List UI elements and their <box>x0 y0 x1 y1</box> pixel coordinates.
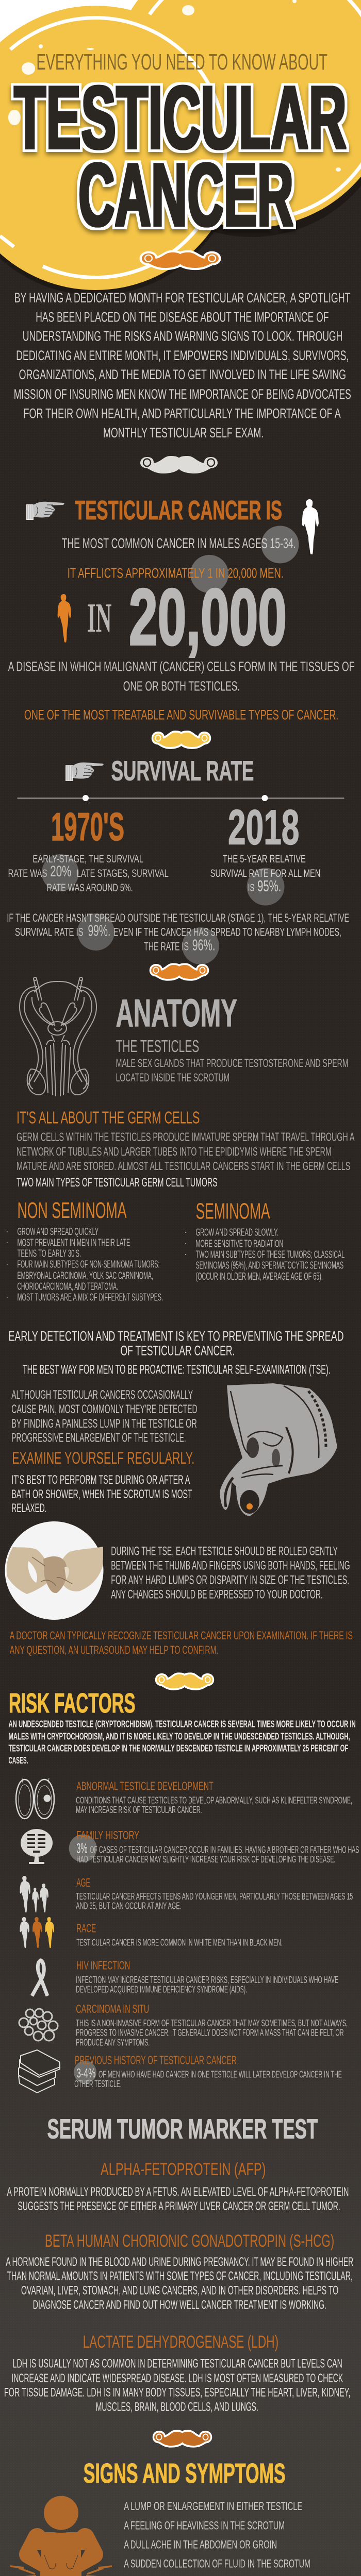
panel: seminoma: MORE SENSITIVE TO RADIATION <box>196 1238 283 1249</box>
icon: cells <box>19 2009 58 2041</box>
risk: race <box>20 1917 283 1948</box>
1970s survival text: LATE STAGES, SURVIVAL <box>77 868 169 879</box>
1970s survival text: RATE WAS <box>8 868 47 879</box>
detection paragraph: CAUSE PAIN, MOST COMMONLY THEY'RE DETECTED <box>11 1402 198 1416</box>
marker: beta HCG <box>6 2231 353 2312</box>
marker: AFP <box>7 2160 349 2213</box>
the testicles text: THE TESTICLES <box>116 1037 199 1056</box>
risk: carcinoma in situ: PRODUCE ANY SYMPTOMS. <box>76 2037 150 2047</box>
best time text: BATH OR SHOWER, WHEN THE SCROTUM IS MOST <box>11 1487 192 1501</box>
panel: non seminoma: MOST PREVALENT IN MEN IN THEIR LATE <box>18 1236 130 1249</box>
symptoms list: A DULL ACHE IN THE ABDOMEN OR GROIN <box>124 2538 277 2551</box>
doctor callout: ANY QUESTION, AN ULTRASOUND MAY HELP TO CONFIRM. <box>10 1643 218 1656</box>
risk: abnormal development <box>16 1778 352 1819</box>
risk: previous history: OTHER TESTICLE. <box>74 2079 122 2089</box>
best time text <box>11 1473 192 1515</box>
marker: LDH <box>4 2332 350 2414</box>
TSE technique text <box>111 1544 350 1601</box>
panel: non seminoma: NON SEMINOMA <box>18 1198 127 1223</box>
stage survival paragraph: SURVIVAL RATE IS <box>15 926 84 939</box>
icon: white man silhouette <box>302 499 319 554</box>
detection paragraph: ALTHOUGH TESTICULAR CANCERS OCCASIONALLY <box>11 1388 193 1402</box>
icon: family tree <box>21 1829 53 1864</box>
year: 2018: 2018 <box>228 800 299 855</box>
intro paragraph: MONTHLY TESTICULAR SELF EXAM. <box>103 425 264 440</box>
stat: in 20,000 <box>87 572 287 662</box>
icon: yellow moustache <box>153 733 209 747</box>
risk: family history: 3% <box>76 1840 88 1856</box>
2018 survival text: THE 5-YEAR RELATIVE <box>223 853 306 865</box>
examine yourself heading: EXAMINE YOURSELF REGULARLY. <box>12 1449 194 1467</box>
risk: HIV infection <box>32 1959 338 1996</box>
risk: previous history: 3-4% <box>76 2066 95 2080</box>
icon: pointing hand <box>26 502 64 520</box>
highlight circle: one in <box>190 555 228 593</box>
risk: abnormal development: ABNORMAL TESTICLE DEVELOPMENT <box>76 1780 214 1793</box>
2018 survival text: 95%. <box>257 877 281 895</box>
icon: stack of books <box>19 2050 60 2093</box>
icon: white moustache <box>140 456 218 473</box>
panel: seminoma <box>185 1199 344 1282</box>
panel: non seminoma: FOUR MAIN SUBTYPES OF NON-SEMINOMA TUMORS: <box>18 1259 159 1270</box>
1970s survival text: EARLY-STAGE, THE SURVIVAL <box>32 853 143 865</box>
heading: germ cells: IT'S ALL ABOUT THE GERM CELLS <box>17 1108 200 1127</box>
detection paragraph <box>11 1388 198 1445</box>
heading: risk factors: RISK FACTORS <box>9 1688 135 1719</box>
risk: previous history <box>19 2050 342 2093</box>
icon: orange man <box>58 594 71 642</box>
icon: three people <box>20 1876 48 1912</box>
early detection heading: OF TESTICULAR CANCER. <box>121 1343 235 1359</box>
panel: non seminoma: TEENS TO EARLY 30'S. <box>18 1248 81 1260</box>
icon: orange moustache anatomy <box>151 965 207 979</box>
risk: HIV infection: HIV INFECTION <box>76 1959 130 1972</box>
1970s survival text <box>8 853 169 894</box>
header discs <box>0 0 361 295</box>
risk: carcinoma in situ <box>19 2002 348 2047</box>
definition text <box>8 659 355 693</box>
panel: seminoma: GROW AND SPREAD SLOWLY. <box>196 1226 278 1239</box>
icon: pointing hand survival <box>65 762 104 781</box>
symptoms list <box>124 2500 326 2576</box>
risk: previous history: PREVIOUS HISTORY OF TESTICULAR CANCER <box>75 2053 237 2066</box>
year: 1970s: 1970'S <box>51 805 124 849</box>
best time text: RELAXED. <box>11 1501 47 1515</box>
panel: seminoma: SEMINOMA <box>196 1199 270 1224</box>
stage survival paragraph: 99%. <box>88 922 110 940</box>
icon: anatomical cross-section <box>220 1383 337 1516</box>
undescended testicle paragraph <box>8 1719 356 1766</box>
risk: abnormal development: MAY INCREASE RISK OF TESTICULAR CANCER. <box>76 1805 202 1815</box>
icon: orange moustache <box>142 252 219 268</box>
germ cells paragraph <box>17 1130 355 1173</box>
icon: ribbon <box>32 1960 47 1996</box>
icon: person in pain <box>9 2496 113 2576</box>
2018 survival text: IS <box>248 882 254 894</box>
best time text: IT'S BEST TO PERFORM TSE DURING OR AFTER A <box>11 1473 190 1487</box>
stage survival paragraph <box>7 911 349 964</box>
heading: anatomy: ANATOMY <box>116 991 237 1035</box>
doctor callout <box>10 1629 353 1656</box>
icon: anatomy line drawing <box>20 977 96 1096</box>
heading: survival rate: SURVIVAL RATE <box>111 756 254 787</box>
icon: testicles <box>16 1778 54 1819</box>
risk: family history <box>21 1828 359 1865</box>
risk: age: AND 35, BUT CAN OCCUR AT ANY AGE. <box>76 1901 182 1911</box>
panel: non seminoma: GROW AND SPREAD QUICKLY <box>18 1226 99 1238</box>
risk: age: AGE <box>76 1876 90 1889</box>
detection paragraph: PROGRESSIVE ENLARGEMENT OF THE TESTICLE. <box>11 1431 186 1445</box>
marker: AFP: ALPHA-FETOPROTEIN (AFP) <box>101 2160 266 2179</box>
timeline <box>18 795 344 801</box>
title: testicular cancer <box>14 67 347 245</box>
1970s survival text: RATE WAS AROUND 5%. <box>47 882 133 894</box>
highlight circle: ages <box>261 526 299 564</box>
detection paragraph: BY FINDING A PAINLESS LUMP IN THE TESTICLE OR <box>11 1417 197 1431</box>
panel: non seminoma <box>7 1198 163 1303</box>
1970s survival text: 20% <box>50 863 71 880</box>
definition text: ONE OR BOTH TESTICLES. <box>123 678 240 693</box>
illustration: hands self-exam <box>5 1521 103 1620</box>
stage survival paragraph: 96%. <box>192 936 215 954</box>
two main types subheading: TWO MAIN TYPES OF TESTICULAR GERM CELL TUMORS <box>17 1176 218 1190</box>
risk: age <box>20 1876 353 1912</box>
panel: non seminoma: CHORIOCARCINOMA, AND TERATOMA. <box>18 1280 118 1292</box>
icon: dark orange moustache <box>154 2432 210 2446</box>
undescended testicle paragraph: CASES. <box>8 1755 28 1766</box>
risk: carcinoma in situ: CARCINOMA IN SITU <box>76 2002 149 2015</box>
the testicles text <box>116 1037 349 1084</box>
risk: race: RACE <box>76 1922 96 1935</box>
2018 survival text <box>210 853 320 906</box>
early detection heading <box>8 1328 343 1359</box>
icon: three colored figures <box>20 1917 54 1948</box>
the testicles text: LOCATED INSIDE THE SCROTUM <box>116 1071 229 1084</box>
icon: yellow moustache risk <box>157 1674 212 1688</box>
panel: non seminoma: EMBRYONAL CARCINOMA, YOLK SAC CARNINOMA, <box>18 1270 153 1282</box>
risk: family history: FAMILY HISTORY <box>76 1828 139 1842</box>
panel: non seminoma: MOST TUMORS ARE A MIX OF DIFFERENT SUBTYPES. <box>18 1291 163 1303</box>
intro paragraph <box>14 290 351 440</box>
stat: in 20,000: IN <box>87 596 111 641</box>
stage survival paragraph: THE RATE IS <box>144 940 189 953</box>
